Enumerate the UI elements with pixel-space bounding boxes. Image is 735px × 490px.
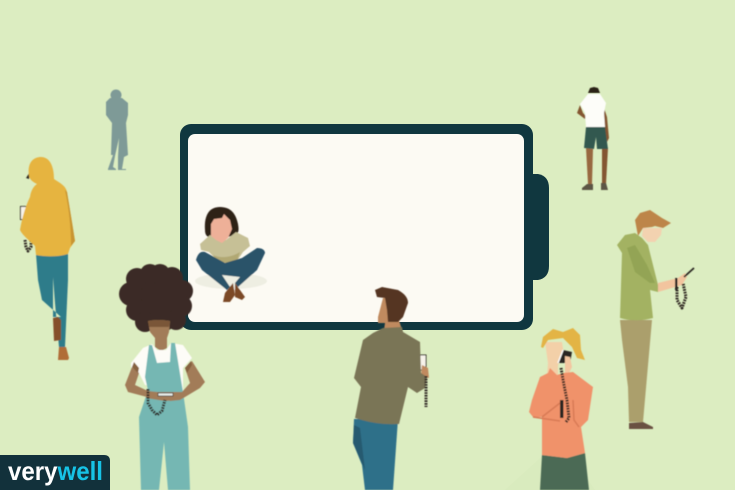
person: afro woman with overalls bbox=[119, 264, 205, 490]
person: grey distant figure bbox=[106, 90, 128, 170]
person: standing man in white shirt, back view bbox=[577, 87, 609, 190]
person: man in green hoodie with phone bbox=[617, 210, 694, 429]
person: man in olive jacket bbox=[353, 287, 429, 490]
logo: verywell: verywell bbox=[8, 456, 103, 486]
person: yellow hoodie with phone bbox=[20, 157, 75, 360]
person: sitting woman covering face bbox=[195, 207, 267, 302]
person: woman with phone at ear bbox=[529, 328, 593, 490]
battery bbox=[180, 124, 549, 330]
